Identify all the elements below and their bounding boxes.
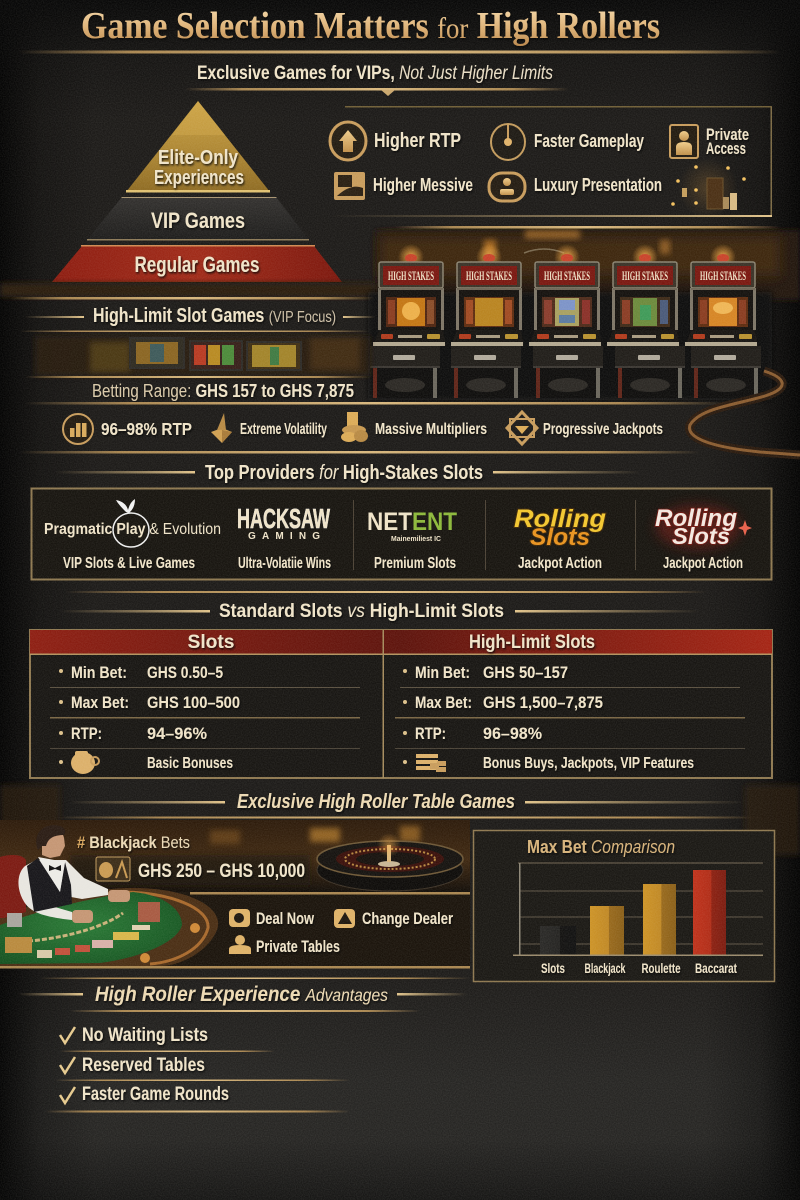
bar: baccarat (693, 870, 726, 955)
roulette wheel (317, 833, 463, 891)
label: RTP: 96–98% RTP (101, 419, 192, 439)
label: private access (706, 125, 749, 158)
label: higher RTP: Higher RTP (374, 130, 461, 152)
comparison table (30, 630, 772, 778)
logo: rolling slots red: Rolling (655, 505, 737, 532)
column: standard slots: 94–96% (147, 725, 207, 743)
table action buttons (229, 909, 453, 956)
chart category labels: Blackjack (584, 961, 626, 976)
casino backdrop (0, 785, 800, 968)
logo: pragmatic play and evolution (44, 499, 221, 547)
table header (30, 630, 772, 655)
icon: faster gameplay (491, 124, 525, 160)
pyramid tier: regular games (52, 245, 342, 282)
logo: netent: Mainemiliest IC (391, 536, 441, 543)
logo: pragmatic play and evolution: Pragmatic Play & Evolution (44, 521, 221, 538)
button: change dealer: Change Dealer (362, 909, 453, 928)
item: no waiting lists: No Waiting Lists (82, 1025, 208, 1046)
title: Game Selection Matters for High Rollers (81, 5, 660, 47)
column: standard slots: Basic Bonuses (147, 755, 233, 772)
panel: providers (32, 488, 772, 580)
button: deal now: Deal Now (256, 909, 315, 928)
label: luxury presentation: Luxury Presentation (534, 175, 662, 195)
logo: rolling slots yellow (514, 505, 606, 551)
icon: luxury presentation (489, 173, 525, 201)
icon: gold stacks (416, 754, 446, 772)
bar: roulette (643, 884, 676, 955)
caption: premium slots: Premium Slots (374, 555, 456, 572)
logo: netent: NETENT (367, 508, 457, 536)
icon: private access (670, 125, 698, 158)
icon: higher massive (334, 172, 365, 200)
dealer (0, 825, 130, 927)
table header: Slots (188, 632, 234, 653)
slot machine 4: HIGH STAKES (622, 268, 668, 283)
label: massive multipliers: Massive Multipliers (375, 421, 487, 438)
label: faster gameplay: Faster Gameplay (534, 131, 644, 151)
blackjack bets: # Blackjack Bets (77, 833, 190, 852)
icon: multiplier stacks (341, 412, 368, 442)
icon: volatility diamonds (211, 413, 232, 443)
slot thumbnails strip (35, 336, 370, 376)
features row (20, 412, 700, 454)
pyramid tier: VIP games (87, 197, 309, 240)
heading: exclusive table games: Exclusive High Roller Table Games (237, 791, 515, 813)
chart category labels (541, 961, 737, 976)
chart category labels: Baccarat (695, 961, 737, 976)
heading: high roller experience advantages: High Roller Experience Advantages (95, 983, 388, 1006)
pyramid (52, 101, 342, 282)
slot machine 2 (451, 244, 524, 398)
item: faster game rounds (60, 1084, 229, 1105)
caption: VIP slots: VIP Slots & Live Games (63, 555, 195, 572)
heading: high-limit slot games: High-Limit Slot Games (VIP Focus) (93, 305, 336, 327)
logo: rolling slots yellow: Slots (530, 524, 590, 551)
column: standard slots: RTP: (71, 725, 102, 743)
icon: progressive jackpot emblem (507, 412, 537, 444)
pyramid tier: elite-only: Experiences (154, 167, 244, 189)
column: high-limit slots: Bonus Buys, Jackpots, VIP Features (483, 755, 694, 772)
column: high-limit slots (403, 664, 694, 772)
logo: rolling slots red (655, 505, 752, 549)
slot machine 4 (607, 244, 685, 398)
panel: benefits (330, 106, 772, 218)
logo: rolling slots yellow: Rolling (514, 505, 606, 533)
slot machine 5: HIGH STAKES (700, 268, 746, 283)
column: standard slots: GHS 0.50–5 (147, 664, 223, 682)
label: higher messive: Higher Messive (373, 175, 473, 195)
label: extreme volatility: Extreme Volatility (240, 421, 327, 438)
icon: candles and chest (671, 158, 746, 218)
column: high-limit slots: Min Bet: (415, 664, 470, 682)
label: private access: Access (706, 139, 746, 158)
logo: hacksaw gaming: HACKSAW (237, 503, 330, 534)
chart category labels: Roulette (642, 961, 681, 976)
logo: hacksaw gaming (237, 503, 330, 542)
table header: High-Limit Slots (469, 632, 595, 653)
pyramid tier: VIP games: VIP Games (151, 208, 245, 233)
column: high-limit slots: RTP: (415, 725, 446, 743)
caption: jackpot action: Jackpot Action (518, 555, 602, 572)
betting range: Betting Range: GHS 157 to GHS 7,875 (92, 380, 354, 401)
column: standard slots: Max Bet: (71, 694, 129, 712)
button: change dealer (334, 909, 453, 928)
slot machines (370, 244, 761, 398)
label: progressive jackpots: Progressive Jackpots (543, 421, 663, 438)
pyramid tier: regular games: Regular Games (134, 252, 260, 277)
column: standard slots (59, 664, 240, 774)
column: high-limit slots: 96–98% (483, 725, 542, 743)
caption: ultra-volatile wins: Ultra-Volatiie Wins (238, 555, 331, 572)
bar: blackjack (590, 906, 624, 955)
column: standard slots: Min Bet: (71, 664, 127, 682)
bar: slots (540, 926, 576, 955)
blackjack bets: GHS 250 – GHS 10,000 (138, 861, 305, 882)
column: standard slots: GHS 100–500 (147, 694, 240, 712)
heading: top providers: Top Providers for High-Stakes Slots (205, 462, 483, 484)
blackjack bets (77, 833, 305, 882)
icon: RTP bars (63, 414, 93, 444)
slot machine backdrop (0, 226, 800, 400)
slot machine 3: HIGH STAKES (544, 268, 590, 283)
column: high-limit slots: Max Bet: (415, 694, 472, 712)
icon: chip bag (96, 857, 130, 881)
chart title: Max Bet Comparison (527, 837, 675, 857)
chart panel: max bet comparison (474, 830, 774, 982)
slot machine 1: HIGH STAKES (388, 268, 434, 283)
slot machine 5 (685, 244, 761, 398)
button: private tables: Private Tables (256, 937, 340, 956)
caption: jackpot action: Jackpot Action (663, 555, 743, 572)
button: private tables (229, 935, 340, 956)
icon: higher RTP (330, 122, 366, 160)
item: reserved tables: Reserved Tables (82, 1055, 205, 1076)
advantages checklist (45, 1025, 350, 1112)
heading: standard vs high-limit: Standard Slots vs High-Limit Slots (219, 600, 504, 622)
label: private access: Private (706, 125, 749, 144)
slot machine 1 (370, 244, 446, 398)
logo: rolling slots red: Slots (672, 523, 730, 549)
icon: money bag (71, 751, 99, 774)
decorative road ribbon (690, 371, 800, 455)
logo: hacksaw gaming: GAMING (248, 531, 320, 542)
chart category labels: Slots (541, 961, 565, 976)
column: high-limit slots: GHS 1,500–7,875 (483, 694, 603, 712)
subtitle (185, 62, 569, 96)
slot machine 2: HIGH STAKES (466, 268, 512, 283)
column: high-limit slots: GHS 50–157 (483, 664, 568, 682)
subtitle: Exclusive Games for VIPs, Not Just Higher Limits (197, 62, 553, 84)
button: deal now (229, 909, 315, 928)
blackjack table (0, 888, 218, 966)
pyramid tier: elite-only (126, 101, 270, 192)
high-limit slot games section (10, 297, 725, 404)
item: faster game rounds: Faster Game Rounds (82, 1084, 229, 1105)
pyramid tier: elite-only: Elite-Only (158, 147, 239, 169)
slot machine 3 (529, 244, 603, 398)
